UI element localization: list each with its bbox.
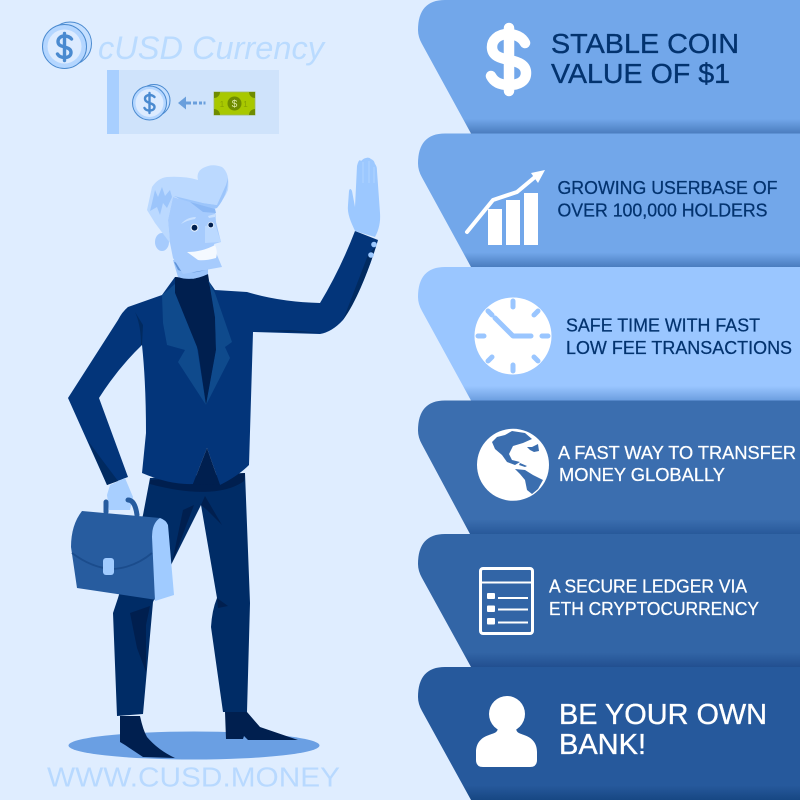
lapels: [162, 280, 232, 405]
website url: WWW.CUSD.MONEY: [47, 762, 340, 792]
face: [168, 197, 222, 274]
icon: dollar sign: [491, 28, 526, 91]
jacket vent: [193, 448, 220, 485]
eyebrows: [181, 214, 215, 224]
panel: stable coin: [418, 0, 800, 134]
icon: growth chart: [467, 170, 545, 245]
text: GROWING USERBASE OF: [558, 178, 778, 198]
illustration: businessman: [68, 158, 380, 759]
panel: transfer globally: [418, 400, 800, 534]
smile: [187, 245, 217, 260]
heading text: BANK!: [559, 729, 646, 761]
panel: secure ledger: [418, 534, 800, 667]
icon: globe: [477, 429, 549, 501]
ground shadow: [68, 732, 320, 760]
text: LOW FEE TRANSACTIONS: [566, 337, 792, 358]
lower hand: [107, 478, 133, 510]
panel: growing userbase: [418, 134, 800, 267]
title: cUSD Currency: [98, 30, 326, 66]
text: A SECURE LEDGER VIA: [549, 576, 747, 596]
icon: clock: [474, 298, 552, 374]
icon: ledger: [480, 568, 532, 634]
eyes: [190, 222, 214, 232]
text: SAFE TIME WITH FAST: [566, 314, 760, 336]
panel: be your own bank: [418, 667, 800, 800]
heading text: VALUE OF $1: [551, 58, 730, 89]
sleeve shadows: [88, 246, 376, 485]
text: OVER 100,000 HOLDERS: [558, 200, 768, 220]
trousers: [113, 473, 250, 716]
heading text: BE YOUR OWN: [559, 699, 767, 731]
neck: [173, 260, 208, 279]
arrow: [178, 96, 206, 110]
cuff buttons: [368, 242, 377, 258]
hair: [147, 165, 228, 243]
icon: person: [476, 696, 537, 767]
raised hand: [348, 158, 380, 237]
briefcase: [71, 500, 174, 601]
panel: safe time: [418, 267, 800, 400]
quiff shadow: [190, 202, 216, 213]
shoes: [120, 712, 298, 758]
text: MONEY GLOBALLY: [559, 464, 725, 485]
icon: banknote: $: [232, 99, 238, 110]
text: ETH CRYPTOCURRENCY: [549, 599, 759, 619]
heading text: STABLE COIN: [551, 28, 739, 59]
icon: banknote: 1: [243, 100, 248, 109]
icon: small coin: [132, 84, 170, 120]
jacket: [68, 231, 378, 485]
neck shadow: [174, 262, 205, 272]
logo: coin icon: [42, 22, 92, 68]
nose highlight: [205, 224, 221, 243]
turtleneck: [175, 274, 216, 405]
handle: [106, 500, 137, 515]
icon: banknote: [214, 92, 255, 115]
text: A FAST WAY TO TRANSFER: [558, 442, 796, 463]
icon: banknote: 1: [220, 100, 225, 109]
conversion box: [107, 70, 279, 134]
ear: [155, 233, 169, 251]
hair strands: [150, 178, 228, 215]
